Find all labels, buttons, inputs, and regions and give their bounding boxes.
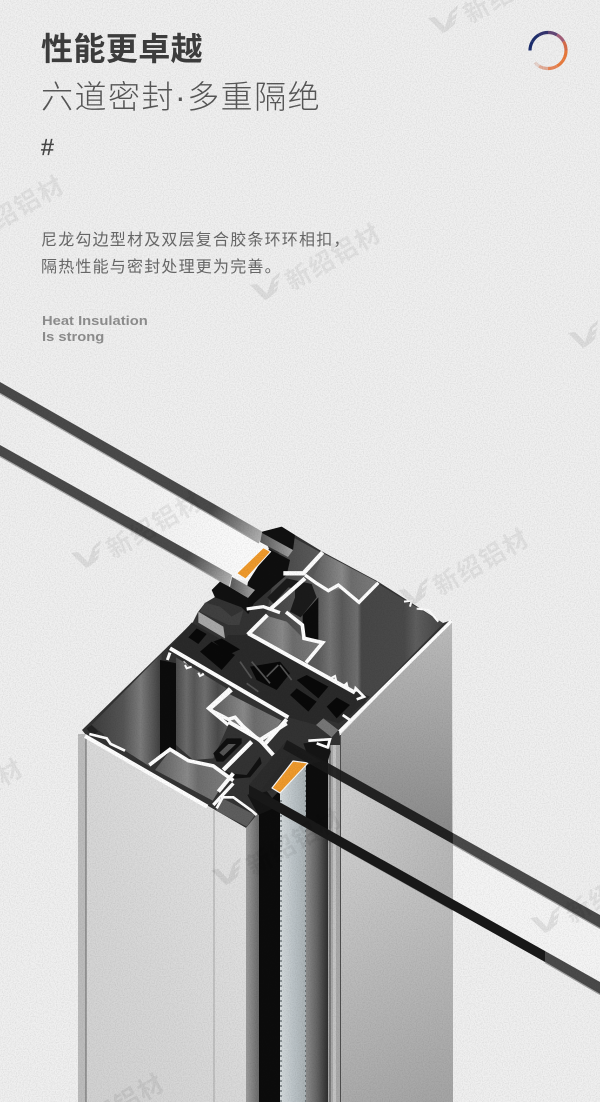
foot white outline (217, 797, 257, 815)
watermark on column: 新绍铝材 (242, 804, 348, 881)
cut section: sash foot (213, 722, 313, 827)
sliver of lit frame (198, 612, 225, 638)
upper glass edge A (0, 382, 263, 543)
English caption: Heat Insulation (42, 314, 148, 328)
streaked chamber (176, 657, 228, 760)
right aluminium frame panel (341, 620, 453, 1102)
title: 性能更卓越 (41, 31, 203, 67)
white profile lines (85, 653, 233, 807)
front aluminium frame column (78, 734, 280, 1102)
gasket core (219, 744, 236, 756)
foot gasket (247, 787, 275, 815)
chamber C1 (313, 553, 377, 600)
corner block (87, 725, 98, 736)
white hook (308, 739, 330, 747)
lower gasket (223, 757, 262, 779)
hash mark: # (41, 134, 54, 160)
thermal break cavities (188, 628, 350, 718)
left chamber (92, 653, 162, 767)
glass end frame (249, 740, 294, 796)
thermal break lattice (240, 662, 292, 692)
English caption (42, 314, 148, 344)
watermark top right (428, 0, 565, 33)
watermark on glass: 新绍铝材 (102, 487, 208, 564)
foot chamber (216, 797, 255, 827)
description: 隔热性能与密封处理更为完善。 (41, 259, 282, 276)
gasket tail (212, 582, 248, 614)
watermark right lower (530, 852, 600, 933)
cut section: upper frame profile (167, 527, 452, 765)
top gasket (262, 527, 295, 550)
description: 尼龙勾边型材及双层复合胶条环环相扣， (41, 232, 351, 249)
thermal break body (167, 623, 370, 725)
chamber C2 (250, 616, 322, 662)
gasket octagon (213, 738, 242, 762)
inner chamber backdrop (248, 538, 443, 702)
lower glass edge 1 over background (453, 833, 600, 928)
lower glass edge 2 over frame (249, 785, 545, 962)
watermark centre text area: 新绍铝材 (281, 219, 387, 296)
watermark beside frame: 新绍铝材 (429, 524, 535, 601)
end dark frame fill (249, 743, 313, 794)
English caption: Is strong (42, 330, 104, 344)
subtitle: 六道密封·多重隔绝 (41, 79, 321, 115)
orange spacer upper (237, 548, 271, 579)
weather strip brush (316, 718, 338, 737)
section dark base (82, 527, 452, 828)
lower glass pane (249, 740, 600, 994)
lower glass edge 1 over frame (283, 740, 453, 844)
watermark right edge (568, 267, 600, 348)
glass cap A (260, 533, 293, 557)
white upper Y (218, 722, 287, 792)
upper glass pane (0, 382, 270, 586)
lower gray chamber (200, 603, 243, 625)
lower glass edge 2 over background (545, 951, 600, 994)
black vertical wall (160, 660, 177, 757)
black inner wall (303, 597, 318, 642)
black spacer block (242, 549, 290, 614)
insulating glass strips seen through the window (280, 735, 342, 1102)
upper glass edge B (0, 445, 232, 586)
aluminium white lines (170, 552, 452, 745)
lower orange spacer (272, 761, 308, 793)
white mullion diagonal (223, 742, 252, 770)
lower gasket (303, 741, 331, 765)
progress ring icon (530, 32, 566, 69)
description (41, 231, 351, 276)
gasket (267, 578, 317, 617)
lower chamber C3 (213, 694, 282, 743)
cut section: lower-left frame profile (85, 653, 233, 807)
glass cap B (230, 577, 255, 598)
chamber C4 (155, 751, 227, 801)
